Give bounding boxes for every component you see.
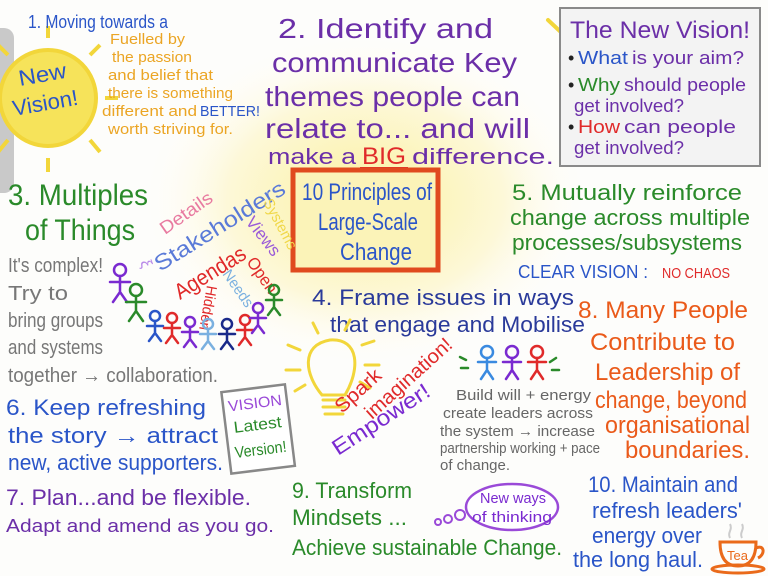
panel: 3 multiples of things: of Things (25, 214, 135, 247)
panel: 6 keep refreshing (6, 395, 223, 475)
panel: 5 mutually reinforce (510, 180, 750, 282)
word cloud: stakeholders: Views (242, 213, 285, 260)
panel: 10 maintain energy: energy over (592, 523, 702, 548)
panel: 1 new vision: different and (102, 103, 197, 120)
word cloud: stakeholders: Needs (219, 267, 257, 311)
panel: 1 new vision: the passion (112, 49, 192, 66)
panel: 10 maintain energy: refresh leaders' (592, 498, 742, 523)
panel: 1 new vision: BETTER! (200, 103, 260, 120)
text: build will and energy: of change. (440, 457, 510, 474)
callout: new ways of thinking: New ways (480, 490, 546, 507)
panel: 1 new vision: 1. Moving towards a (28, 12, 169, 32)
title: 10 principles box: Change (340, 239, 412, 266)
panel: 5 mutually reinforce: processes/subsystems (512, 230, 742, 255)
title: 10 principles box: Large-Scale (318, 209, 418, 236)
panel: 1 new vision: there is something (108, 85, 233, 102)
panel: 7 plan and be flexible: Adapt and amend as you go. (6, 516, 274, 536)
word cloud: stakeholders: Stakeholders (149, 176, 290, 276)
icon: lightbulb (286, 320, 379, 414)
panel: 9 transform mindsets: Mindsets ... (292, 505, 407, 530)
icon: tea cup (712, 524, 764, 573)
panel: 5 mutually reinforce: 5. Mutually reinforce (512, 180, 742, 205)
heading: 4 frame issues: that engage and Mobilise (330, 312, 585, 337)
icon: sun (0, 26, 118, 172)
panel: the new vision: How (578, 117, 621, 137)
panel: 5 mutually reinforce: NO CHAOS (662, 265, 730, 282)
text: spark imagination empower: Empower! (327, 378, 435, 460)
panel: 8 many people (578, 297, 750, 464)
panel: 1 new vision: worth striving for. (107, 121, 233, 138)
title: 10 principles box (293, 170, 438, 270)
icon: vision latest version card: Version! (234, 439, 288, 462)
panel: 8 many people: Contribute to (590, 329, 735, 356)
word cloud: stakeholders: Open (243, 253, 281, 297)
panel: the new vision: is your aim? (632, 48, 744, 68)
text: build will and energy: create leaders across (443, 405, 593, 422)
text: spark imagination empower: imagination! (361, 334, 457, 424)
panel: the new vision: should people (624, 75, 746, 95)
panel: 3 multiples of things: and systems (8, 337, 103, 359)
panel: 1 new vision (0, 12, 260, 193)
panel: 6 keep refreshing: the story → attract (8, 423, 218, 448)
panel: 6 keep refreshing: new, active supporters. (8, 450, 223, 475)
callout: new ways of thinking: of thinking (472, 509, 552, 526)
panel: 8 many people: Leadership of (595, 359, 740, 386)
panel: the new vision: • (568, 75, 574, 95)
panel: 3 multiples of things: together → collaboration. (8, 365, 218, 387)
panel: 1 new vision: and belief that (108, 67, 214, 84)
text: build will and energy: partnership working + pace (440, 440, 600, 457)
panel: the new vision: Why (578, 75, 620, 95)
heading: 2 identify key themes: communicate Key (272, 47, 517, 78)
icon: tea cup: Tea (727, 548, 749, 563)
panel: 10 maintain energy (573, 472, 742, 572)
word cloud: stakeholders: Hidden (195, 284, 220, 332)
icon: vision latest version card: Latest (233, 414, 283, 437)
icon: stick figures group (110, 264, 282, 349)
panel: 10 maintain energy: 10. Maintain and (588, 472, 738, 497)
panel: the new vision: The New Vision! (570, 17, 750, 44)
text: build will and energy: Build will + energy (456, 387, 592, 404)
panel: the new vision (560, 8, 760, 166)
panel: the new vision: What (578, 48, 628, 68)
icon: three leaders (460, 346, 559, 379)
panel: the new vision: • (568, 117, 574, 137)
heading: 2 identify key themes: difference. (412, 144, 554, 169)
heading: 2 identify key themes (265, 13, 554, 170)
panel: 9 transform mindsets (292, 478, 562, 560)
panel: 5 mutually reinforce: change across multiple (510, 205, 750, 230)
word cloud: stakeholders: Agendas (169, 241, 250, 304)
text: build will and energy: the system → increase (440, 423, 595, 440)
heading: 2 identify key themes: make a (268, 144, 357, 169)
panel: 9 transform mindsets: Achieve sustainable Change. (292, 535, 562, 560)
panel: 3 multiples of things: bring groups (8, 310, 103, 332)
heading: 2 identify key themes: relate to... and will (265, 113, 530, 144)
panel: 3 multiples of things (8, 179, 218, 387)
panel: 8 many people: change, beyond (595, 387, 747, 414)
panel: 1 new vision: New (17, 58, 68, 91)
heading: 4 frame issues (312, 285, 585, 337)
text: build will and energy (440, 387, 600, 474)
panel: the new vision: can people (624, 117, 736, 137)
panel: 8 many people: organisational (605, 412, 750, 439)
panel: 5 mutually reinforce: CLEAR VISION : (518, 262, 648, 282)
heading: 2 identify key themes: 2. Identify and (278, 13, 493, 44)
panel: 10 maintain energy: the long haul. (573, 547, 703, 572)
heading: 2 identify key themes: BIG (362, 143, 406, 170)
text: spark imagination empower: Spark (331, 364, 387, 418)
panel: the new vision: get involved? (574, 96, 684, 116)
panel: 1 new vision: Vision! (11, 85, 80, 121)
panel: the new vision: get involved? (574, 138, 684, 158)
icon: vision latest version card: VISION (227, 392, 283, 415)
panel: 1 new vision: Fuelled by (110, 31, 186, 48)
word cloud: stakeholders (136, 176, 300, 332)
arrow: to vision box (548, 20, 580, 50)
text: spark imagination empower (327, 334, 457, 460)
panel: 3 multiples of things: 3. Multiples (8, 179, 148, 212)
word cloud: stakeholders: ξ (136, 258, 155, 270)
panel: the new vision: • (568, 48, 574, 68)
icon: vision latest version card (221, 384, 295, 474)
heading: 2 identify key themes: themes people can (265, 81, 520, 112)
panel: 7 plan and be flexible (6, 485, 274, 536)
panel: 9 transform mindsets: 9. Transform (292, 478, 412, 503)
panel: 8 many people: 8. Many People (578, 297, 748, 324)
callout: new ways of thinking (435, 484, 558, 530)
heading: 4 frame issues: 4. Frame issues in ways (312, 285, 574, 310)
panel: 8 many people: boundaries. (625, 437, 750, 464)
panel: 6 keep refreshing: 6. Keep refreshing (6, 395, 206, 420)
word cloud: stakeholders: Systems (259, 196, 300, 252)
panel: 7 plan and be flexible: 7. Plan...and be flexible. (6, 485, 251, 510)
panel: 3 multiples of things: It's complex! (8, 255, 103, 277)
panel: 3 multiples of things: Try to (8, 283, 68, 305)
word cloud: stakeholders: Details (156, 187, 216, 238)
title: 10 principles box: 10 Principles of (302, 179, 432, 206)
